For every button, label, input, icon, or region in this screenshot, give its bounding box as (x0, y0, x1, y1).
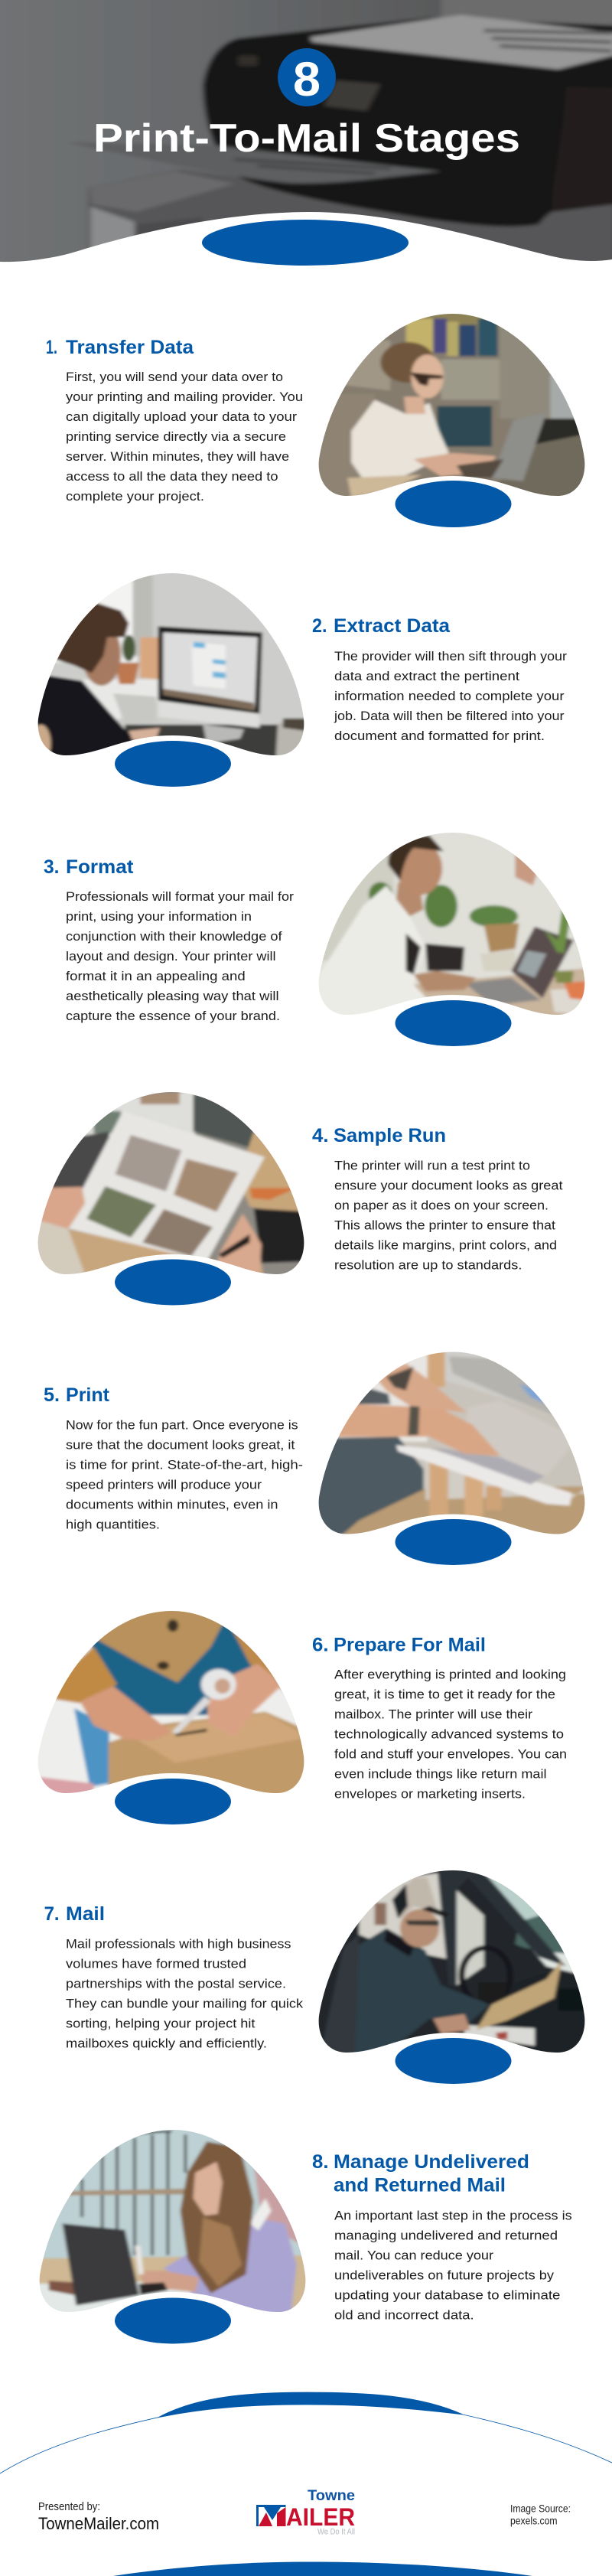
text block: printing service directly via a secure (66, 429, 286, 444)
text block: is time for print. State-of-the-art, high- (66, 1457, 303, 1472)
logo (256, 2488, 355, 2536)
photo: hands loading paper in printer (318, 1352, 584, 1534)
footer arc (0, 2392, 612, 2473)
photo: man at desktop computer (38, 573, 304, 755)
panel: step 1 (46, 306, 601, 527)
number badge (278, 48, 336, 106)
photo: hands taping cardboard box (38, 1611, 304, 1793)
text block (334, 1159, 563, 1273)
text block: job. Data will then be filtered into your (334, 709, 565, 723)
blue ellipse (395, 1000, 511, 1046)
text block: They can bundle your mailing for quick (66, 1997, 304, 2011)
blue ellipse (115, 1260, 231, 1306)
text block: After everything is printed and looking (334, 1668, 566, 1682)
text block: sure that the document looks great, it (66, 1437, 295, 1452)
text block: complete your project. (66, 489, 204, 504)
heading: and Returned Mail (334, 2175, 506, 2196)
heading: 1. (46, 337, 57, 358)
number badge: 8 (293, 53, 321, 106)
text block: mailboxes quickly and efficiently. (66, 2036, 267, 2051)
text block: resolution are up to standards. (334, 1258, 522, 1273)
panel: step 5 (44, 1342, 601, 1565)
text block: conjunction with their knowledge of (66, 929, 282, 944)
text block: great, it is time to get it ready for the (334, 1687, 555, 1702)
text block: This allows the printer to ensure that (334, 1218, 555, 1233)
heading: Print (66, 1384, 110, 1406)
header photo: printer (0, 0, 612, 281)
text block: The printer will run a test print to (334, 1159, 530, 1173)
header panel (0, 0, 612, 306)
blue ellipse (202, 220, 409, 266)
text block (334, 2209, 572, 2322)
title: Print-To-Mail Stages (93, 116, 520, 161)
text block (334, 649, 567, 743)
image source: pexels.com (510, 2515, 557, 2527)
panel: step 8 (31, 2122, 572, 2343)
text block: high quantities. (66, 1517, 160, 1531)
text block: Now for the fun part. Once everyone is (66, 1417, 298, 1432)
text block: technologically advanced systems to (334, 1727, 564, 1742)
text block: on paper as it does on your screen. (334, 1198, 549, 1213)
text block: The provider will then sift through your (334, 649, 567, 664)
heading: Format (66, 856, 134, 878)
text block (66, 889, 294, 1023)
blue ellipse (115, 1779, 231, 1824)
text block: ensure your document looks as great (334, 1179, 563, 1193)
logo: We Do It All (317, 2527, 355, 2536)
logo: Towne (308, 2488, 355, 2504)
text block: undeliverables on future projects by (334, 2268, 555, 2282)
heading: Mail (66, 1903, 105, 1925)
text block: documents within minutes, even in (66, 1497, 278, 1511)
logo: AILER (286, 2503, 355, 2531)
text block: details like margins, print colors, and (334, 1238, 557, 1253)
heading: Sample Run (334, 1125, 446, 1146)
photo: woman at laptop with plants (318, 833, 584, 1015)
blue ellipse (115, 741, 231, 787)
heading: 2. (312, 615, 327, 637)
text block: old and incorrect data. (334, 2308, 474, 2322)
white wave (0, 212, 612, 306)
heading: Prepare For Mail (334, 1635, 486, 1656)
heading: 7. (44, 1903, 60, 1925)
photo: delivery driver in van (318, 1870, 584, 2053)
text block: managing undelivered and returned (334, 2229, 558, 2242)
image source: Image Source: (510, 2503, 571, 2515)
photo: hands holding a printed sheet (38, 1092, 304, 1274)
photo: woman writing at laptop (40, 2130, 306, 2312)
heading: 3. (44, 856, 60, 878)
text block: envelopes or marketing inserts. (334, 1787, 526, 1802)
heading: 5. (44, 1384, 60, 1406)
text block: Professionals will format your mail for (66, 889, 294, 904)
presented by (38, 2501, 159, 2533)
text block: capture the essence of your brand. (66, 1009, 280, 1023)
text block: First, you will send your data over to (66, 370, 283, 384)
presented by: TowneMailer.com (38, 2514, 159, 2533)
presented by: Presented by: (38, 2501, 100, 2513)
photo: woman at laptop (318, 314, 584, 496)
panel: step 2 (24, 562, 567, 787)
heading: Extract Data (334, 615, 451, 637)
image source (510, 2503, 571, 2527)
text block: volumes have formed trusted (66, 1957, 246, 1971)
heading: 6. (312, 1635, 329, 1656)
text block: Mail professionals with high business (66, 1937, 291, 1952)
text block (66, 1417, 303, 1531)
text block (334, 1668, 567, 1802)
panel: step 6 (24, 1603, 567, 1824)
heading (312, 2151, 529, 2196)
text block: access to all the data they need to (66, 469, 278, 484)
text block (66, 1937, 304, 2051)
text block: mailbox. The printer will use their (334, 1707, 532, 1722)
text block: partnerships with the postal service. (66, 1977, 286, 1991)
text block: updating your database to eliminate (334, 2288, 560, 2302)
text block: format it in an appealing and (66, 969, 246, 983)
heading: Manage Undelivered (334, 2151, 529, 2173)
text block: fold and stuff your envelopes. You can (334, 1747, 567, 1762)
panel: step 4 (24, 1084, 563, 1306)
blue ellipse (395, 481, 511, 527)
text block: even include things like return mail (334, 1767, 546, 1782)
text block: speed printers will produce your (66, 1477, 262, 1492)
text block: aesthetically pleasing way that will (66, 989, 279, 1003)
blue ellipse (395, 2038, 511, 2084)
text block: document and formatted for print. (334, 729, 545, 743)
bottom blue arc (113, 2562, 532, 2576)
heading: 8. (312, 2151, 329, 2173)
blue ellipse (395, 1519, 511, 1565)
heading: Transfer Data (66, 337, 194, 358)
footer (0, 2392, 612, 2576)
text block: your printing and mailing provider. You (66, 390, 303, 404)
text block: layout and design. Your printer will (66, 949, 275, 964)
blue ellipse (115, 2297, 231, 2343)
text block: server. Within minutes, they will have (66, 449, 289, 464)
heading: 4. (312, 1125, 329, 1146)
text block: An important last step in the process is (334, 2209, 572, 2222)
text block: can digitally upload your data to your (66, 409, 297, 424)
heading (44, 1384, 110, 1406)
text block: information needed to complete your (334, 689, 565, 703)
text block: mail. You can reduce your (334, 2248, 493, 2262)
text block: sorting, helping your project hit (66, 2017, 256, 2031)
heading (44, 1903, 105, 1925)
text block: print, using your information in (66, 909, 252, 924)
text block (66, 370, 303, 504)
panel: step 3 (44, 824, 601, 1046)
panel: step 7 (44, 1861, 601, 2084)
text block: data and extract the pertinent (334, 669, 519, 683)
